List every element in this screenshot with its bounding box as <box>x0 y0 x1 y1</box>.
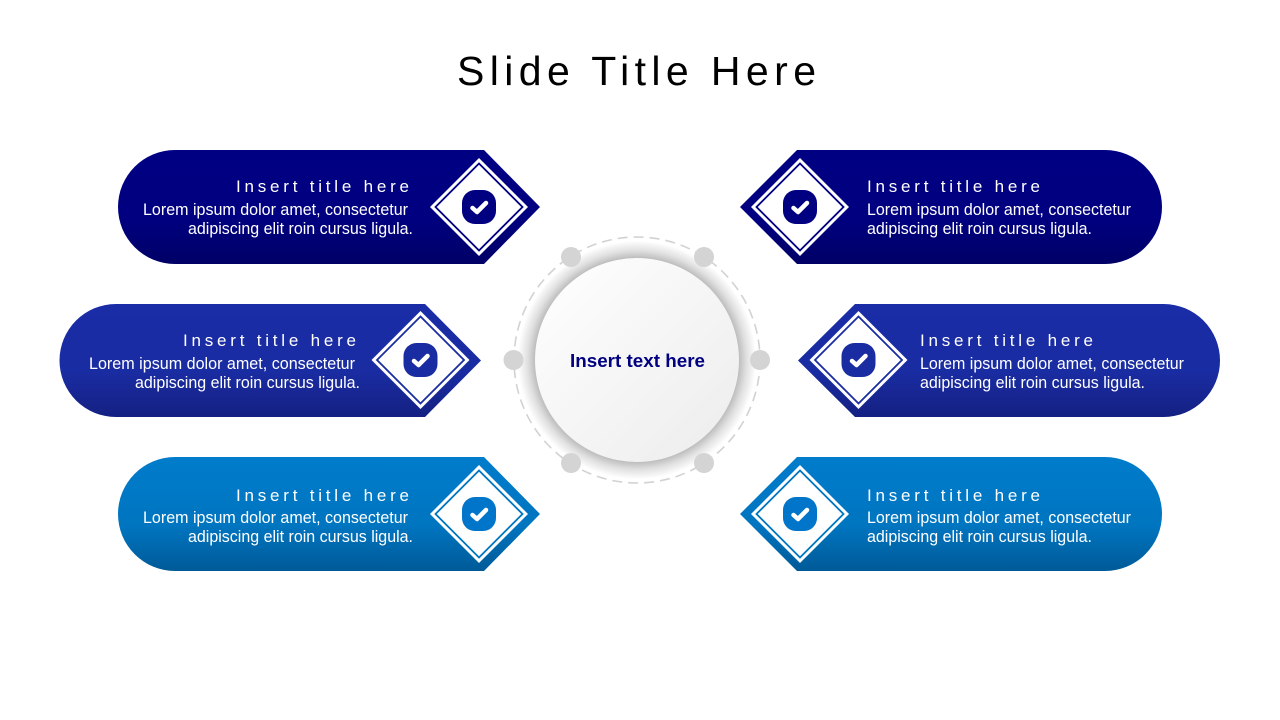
text block: bottom left: Lorem ipsum dolor amet, consectetur <box>143 509 408 527</box>
text block: top left: Lorem ipsum dolor amet, consectetur <box>143 201 408 219</box>
heading: top right: Insert title here <box>867 177 1040 196</box>
panel: bottom left <box>118 457 540 571</box>
heading: top left: Insert title here <box>236 177 409 196</box>
text block: bottom left: adipiscing elit roin cursus ligula. <box>188 528 413 546</box>
panel: middle left <box>59 304 481 417</box>
connector dots <box>504 247 770 473</box>
title: Slide Title Here <box>457 48 816 94</box>
panel: top right <box>740 150 1162 264</box>
center label: Insert text here <box>570 350 705 371</box>
panel: bottom right <box>740 457 1162 571</box>
text block: bottom right <box>867 509 1131 546</box>
icon: check badge top left <box>430 158 528 256</box>
text block: bottom right: Lorem ipsum dolor amet, consectetur <box>867 509 1131 527</box>
heading: bottom right: Insert title here <box>867 486 1040 505</box>
text block: middle right <box>920 355 1184 392</box>
icon: check badge middle left <box>372 311 470 409</box>
text block: middle left <box>89 355 360 392</box>
text block: middle right: Lorem ipsum dolor amet, consectetur <box>920 355 1184 373</box>
icon: check badge bottom right <box>751 465 849 563</box>
text block: top left <box>143 201 413 238</box>
text block: bottom right: adipiscing elit roin cursus ligula. <box>867 528 1092 546</box>
panel: middle right <box>798 304 1220 417</box>
icon: check badge middle right <box>810 311 908 409</box>
text block: top left: adipiscing elit roin cursus ligula. <box>188 220 413 238</box>
text block: top right: Lorem ipsum dolor amet, consectetur <box>867 201 1131 219</box>
heading: middle right: Insert title here <box>920 331 1093 350</box>
text block: middle left: Lorem ipsum dolor amet, consectetur <box>89 355 355 373</box>
icon: check badge bottom left <box>430 465 528 563</box>
panel: top left <box>118 150 540 264</box>
center disc <box>535 258 739 462</box>
heading: bottom left: Insert title here <box>236 486 409 505</box>
icon: check badge top right <box>751 158 849 256</box>
text block: top right: adipiscing elit roin cursus ligula. <box>867 220 1092 238</box>
text block: middle right: adipiscing elit roin cursus ligula. <box>920 374 1145 392</box>
text block: middle left: adipiscing elit roin cursus ligula. <box>135 374 360 392</box>
text block: top right <box>867 201 1131 238</box>
text block: bottom left <box>143 509 413 546</box>
heading: middle left: Insert title here <box>183 331 356 350</box>
central hub <box>504 237 770 483</box>
